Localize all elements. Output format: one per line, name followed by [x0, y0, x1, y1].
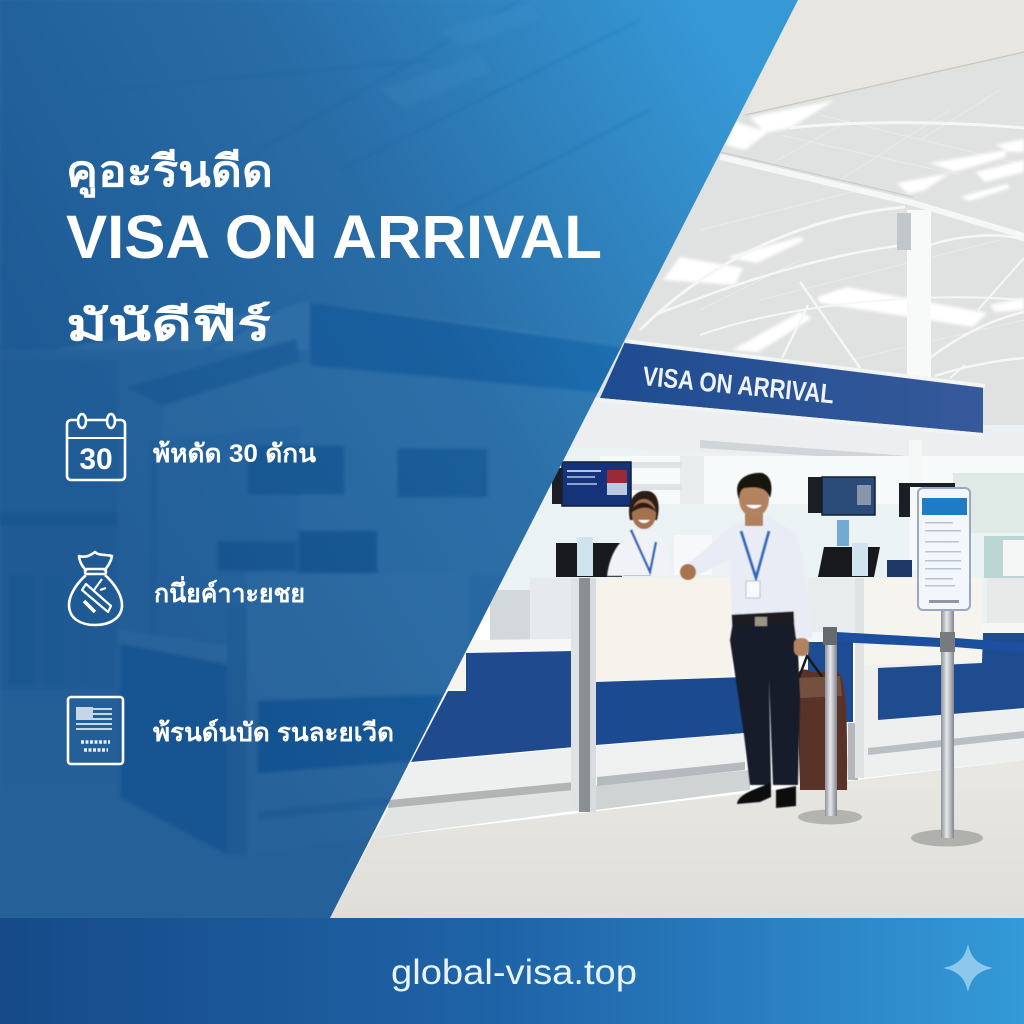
feature label: กนึ่ยค์าาะยชย [154, 576, 305, 608]
back wall [500, 395, 1024, 625]
feature label: พ้รนด์นบัด รนละยเวีด [153, 718, 394, 747]
floor [330, 760, 1024, 918]
pillar [897, 210, 931, 380]
heading line 2: VISA ON ARRIVAL [66, 203, 602, 271]
website address: global-visa.top [391, 953, 637, 992]
heading line 1: คูอะรีนดีด [66, 148, 273, 198]
shirt [680, 517, 812, 638]
feature label: พ้หดัด 30 ดักน [153, 440, 316, 468]
icon: money bag [69, 552, 122, 625]
band continuation [310, 302, 640, 394]
information sign board [918, 488, 970, 610]
queue stanchions [798, 610, 1024, 846]
blue diagonal overlay panel [0, 0, 798, 918]
man traveller [680, 473, 812, 808]
feature: document [68, 697, 394, 764]
footer bar [0, 918, 1024, 1024]
heading line 3: มันัดีฟีร์ [66, 301, 271, 350]
sign label: VISA ON ARRIVAL [641, 361, 835, 409]
icon: calendar: 30 [79, 443, 113, 476]
right counters [808, 577, 1024, 780]
sign band [600, 339, 985, 437]
desk equipment [556, 537, 912, 577]
feature: 30 days [67, 414, 316, 480]
icon: calendar [67, 414, 125, 480]
trousers [730, 618, 800, 785]
icon: passport [68, 697, 123, 764]
overhead monitors [552, 462, 955, 517]
heading [66, 148, 602, 350]
icon: sparkle star [943, 944, 993, 992]
center counter [579, 577, 750, 812]
suitcase [797, 656, 847, 790]
woman staff [606, 490, 660, 577]
ceiling [596, 0, 1024, 425]
left counter [372, 578, 579, 838]
feature: fee [69, 552, 305, 625]
terminal scene behind blue panel [0, 0, 622, 916]
